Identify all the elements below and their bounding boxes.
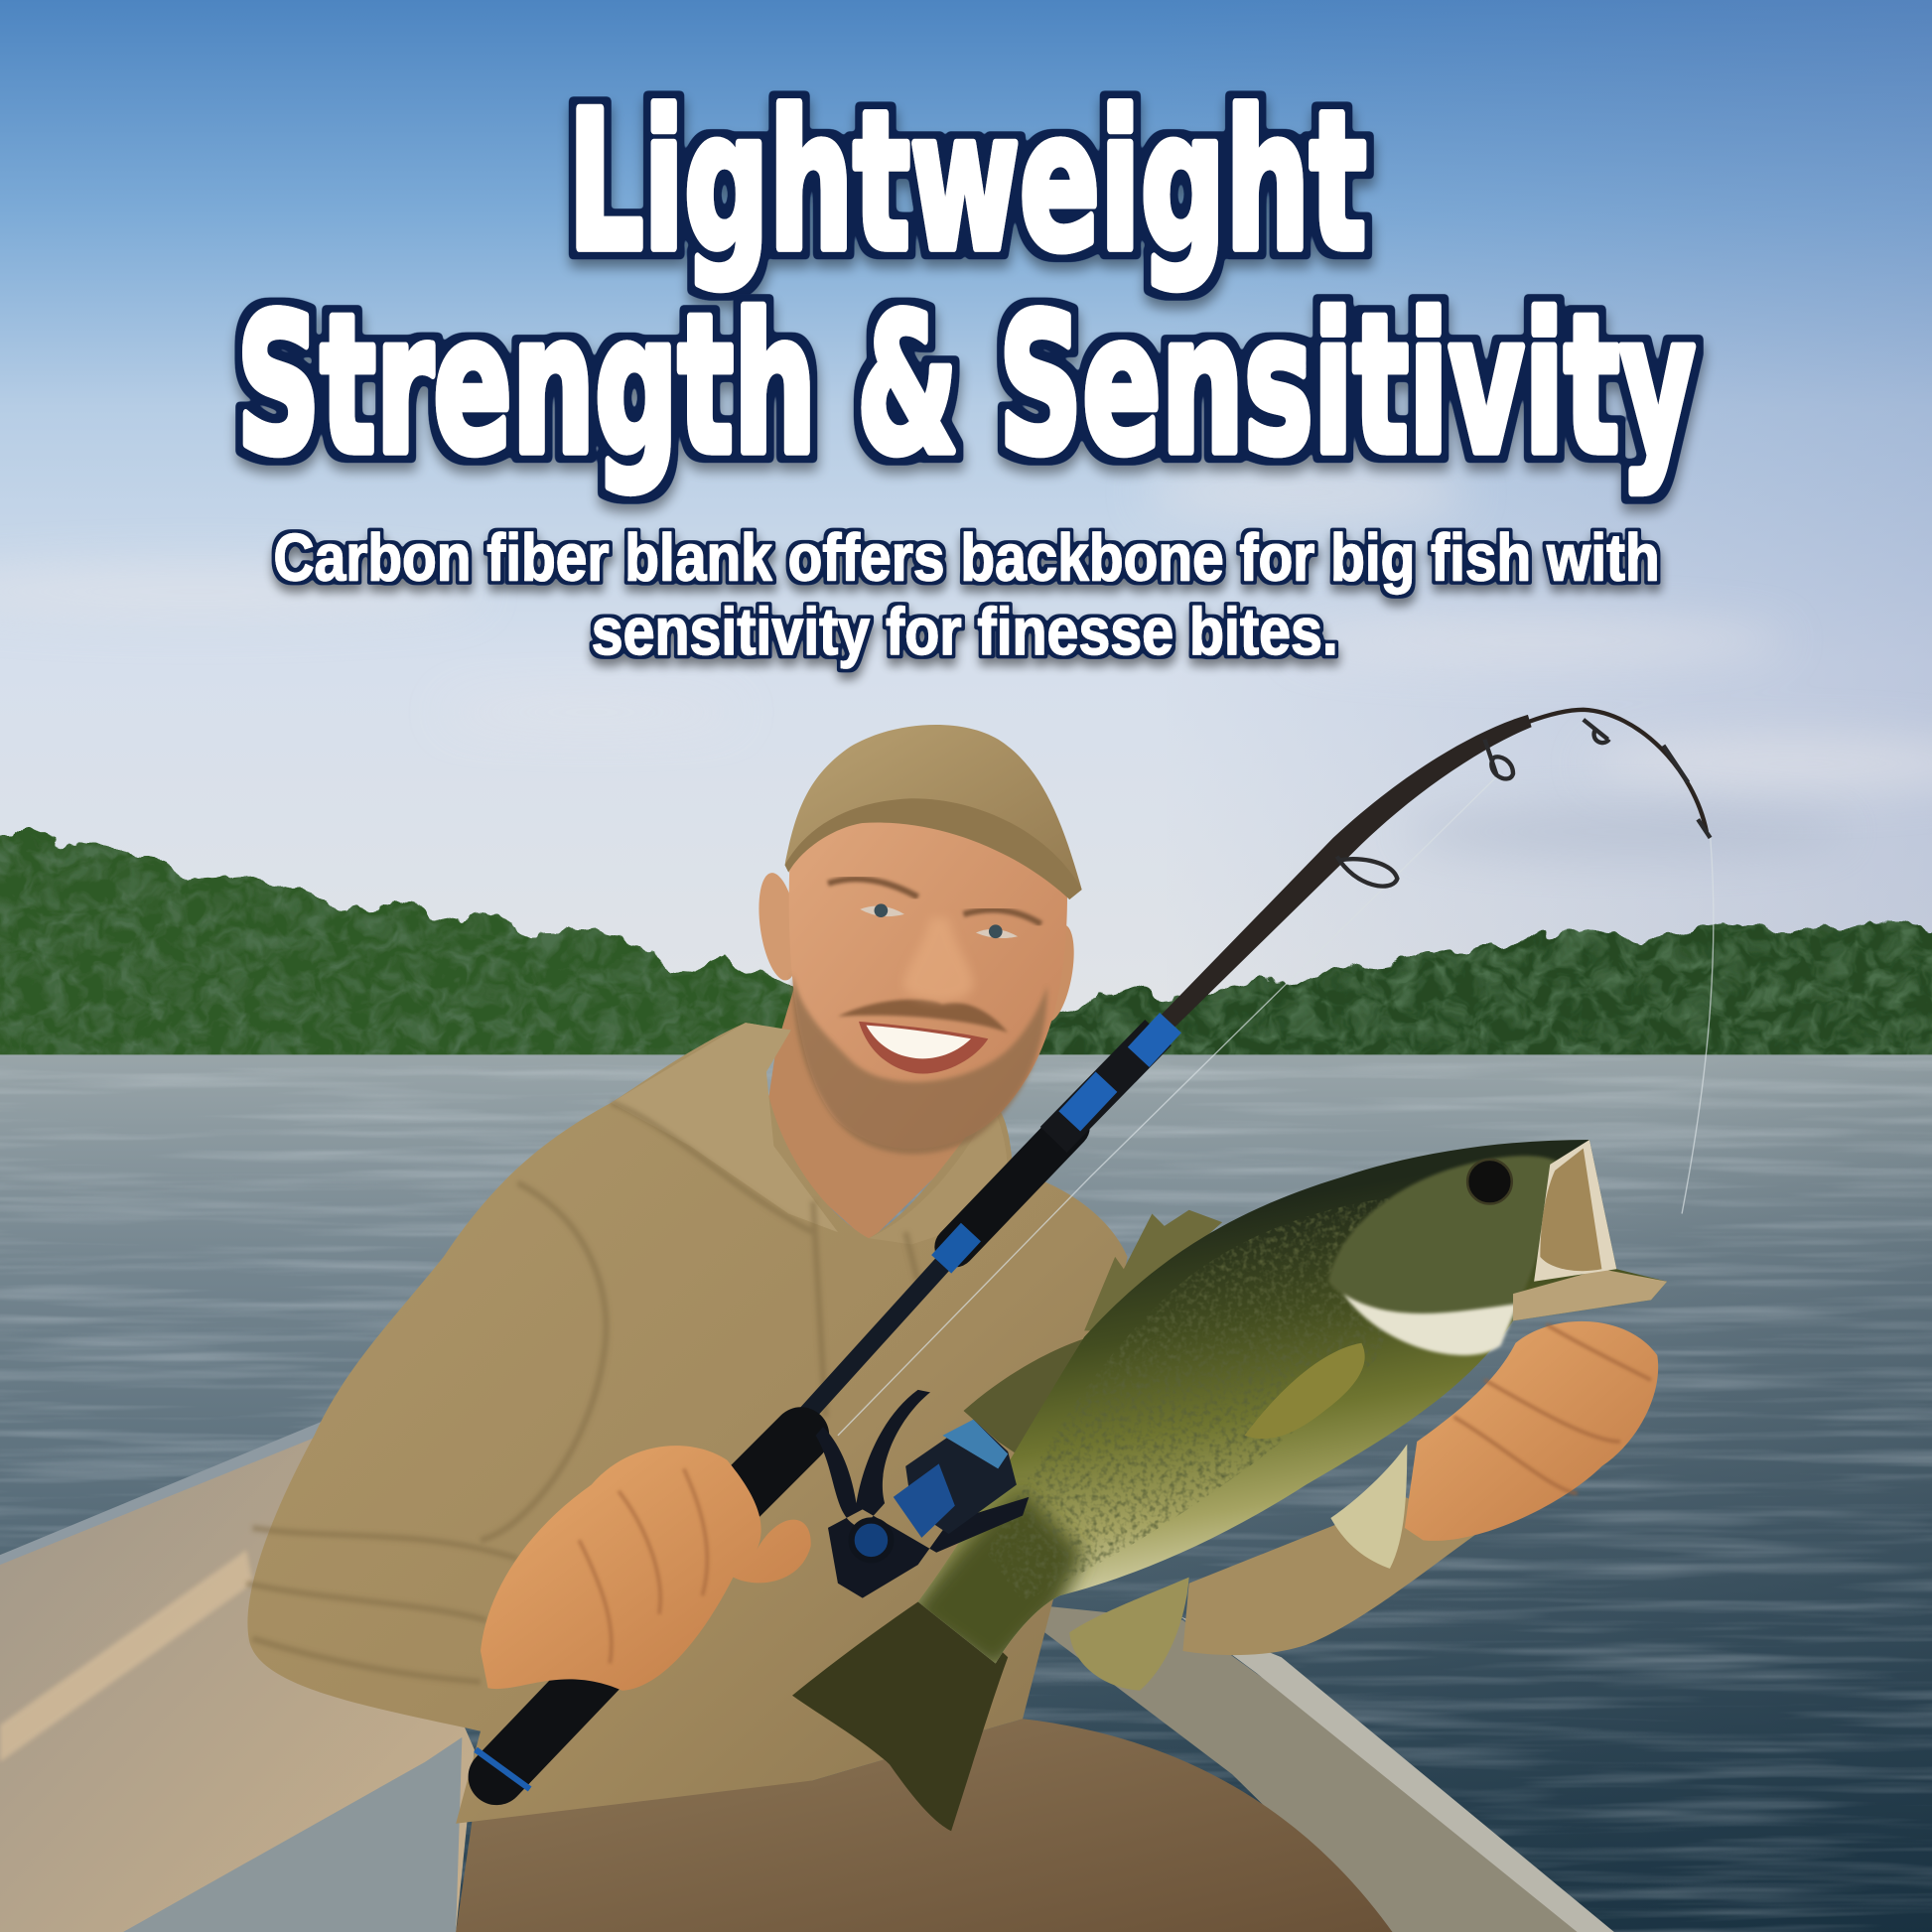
hoodie — [247, 1023, 1128, 1824]
rod upper blank — [1160, 715, 1532, 1031]
subtitle line 1: Carbon fiber blank offers backbone for big fish with — [274, 521, 1660, 596]
knuckle creases — [579, 1468, 707, 1663]
blue butt ring — [476, 1749, 530, 1789]
second dorsal fin — [964, 1337, 1090, 1466]
white gill belly — [1343, 1294, 1518, 1355]
blue body — [894, 1463, 955, 1538]
title — [236, 70, 1696, 496]
moustache — [838, 1000, 1008, 1033]
reel seat — [1053, 1033, 1159, 1140]
neck — [761, 986, 1059, 1242]
trousers — [456, 1719, 1392, 1932]
nose — [903, 918, 973, 1001]
fish body — [918, 1140, 1667, 1663]
blue winding lower — [941, 1232, 971, 1264]
hood flap right — [869, 1103, 1008, 1244]
reel frame — [816, 1390, 1029, 1598]
hood flap left — [612, 1023, 838, 1232]
cap crown — [785, 725, 1082, 899]
ear right — [1032, 922, 1080, 1025]
subtitle — [274, 521, 1660, 669]
anal fin — [1069, 1578, 1189, 1691]
eye right — [964, 909, 1041, 938]
guides — [1337, 720, 1711, 887]
subtitle line 2: sensitivity for finesse bites. — [592, 595, 1338, 669]
cap brim — [785, 798, 1082, 899]
spool lip — [942, 1420, 1008, 1468]
beard — [792, 973, 1047, 1155]
distant tree line left — [0, 827, 794, 1054]
eye — [1467, 1160, 1512, 1204]
dorsal spiny fin — [1084, 1210, 1222, 1330]
boat interior left — [0, 1417, 475, 1932]
blue winding upper — [1069, 1023, 1171, 1121]
left hand gripping rod — [481, 1446, 811, 1691]
pectoral fin — [1244, 1343, 1365, 1439]
handle knob — [852, 1520, 891, 1560]
hoodie folds — [246, 1103, 918, 1682]
distant tree line right — [1038, 919, 1932, 1054]
rod fore grip — [955, 1128, 1069, 1247]
eye left — [828, 879, 918, 917]
face — [789, 804, 1067, 1149]
title line 1: Lightweight — [568, 70, 1366, 293]
pelvic fin — [1330, 1445, 1407, 1569]
finger creases — [1453, 1324, 1651, 1493]
scale texture — [986, 1195, 1417, 1601]
upper jaw — [1534, 1140, 1616, 1282]
butt grip — [496, 1436, 801, 1777]
spinning reel — [816, 1390, 1029, 1598]
largemouth bass — [792, 1140, 1667, 1831]
right sleeve — [1182, 1497, 1484, 1655]
lower jaw — [1513, 1269, 1667, 1320]
tail base shading — [905, 1491, 1084, 1676]
cap — [785, 725, 1082, 899]
mouth interior — [1540, 1149, 1601, 1271]
right hand holding fish — [1405, 1321, 1658, 1541]
smile mouth — [859, 1022, 988, 1073]
ear left — [753, 871, 804, 983]
fishing line — [838, 776, 1714, 1436]
reel spool — [905, 1420, 1017, 1534]
rod mid blank — [776, 1251, 955, 1448]
teeth — [866, 1026, 971, 1058]
angler — [246, 725, 1484, 1932]
rod tip blank — [1528, 710, 1707, 832]
fishing rod — [476, 710, 1714, 1789]
sky background — [0, 0, 1932, 1072]
gill head — [1328, 1156, 1571, 1324]
boat interior and gunwale right — [1004, 1601, 1614, 1932]
tail fin — [792, 1589, 1008, 1831]
lake water — [0, 1047, 1932, 1932]
